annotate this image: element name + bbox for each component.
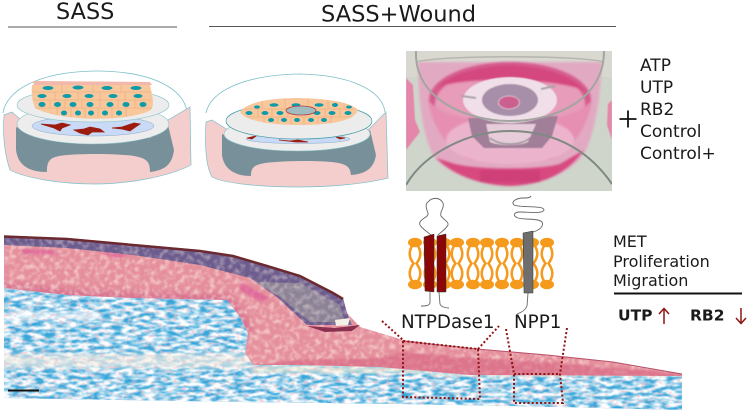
dotted zoom box: NTPDase1 region bbox=[382, 321, 499, 399]
dark line on thin epidermis bbox=[403, 341, 682, 374]
treatment list: ATP bbox=[640, 56, 671, 76]
epidermal cells bbox=[240, 98, 358, 125]
UTP up result: UTP bbox=[618, 306, 653, 324]
outcomes list: Migration bbox=[613, 271, 688, 290]
scab bbox=[307, 325, 360, 332]
upper white disc bbox=[17, 88, 169, 122]
membrane with lipid bilayer bbox=[408, 238, 554, 289]
divider under outcomes bbox=[614, 292, 742, 294]
glass rims bbox=[416, 57, 604, 62]
treatment list: RB2 bbox=[640, 100, 674, 120]
treatment list: Control bbox=[640, 122, 701, 142]
epidermis bbox=[4, 245, 682, 376]
upper white disc bbox=[226, 103, 372, 139]
diagram: wounded SASS culture insert bbox=[206, 74, 388, 187]
grey gel bbox=[222, 130, 376, 176]
outcomes list bbox=[613, 232, 710, 290]
wound bbox=[286, 106, 316, 115]
outcomes list: Proliferation bbox=[613, 252, 710, 271]
epidermal cells bbox=[32, 85, 153, 119]
neighbouring wells bbox=[406, 78, 420, 150]
dish body bbox=[418, 62, 602, 185]
dark keratin line bbox=[4, 236, 343, 299]
lower white disc bbox=[17, 104, 169, 144]
RB2 down result: RB2 bbox=[690, 306, 725, 324]
stratum corneum bbox=[33, 81, 152, 86]
RB2 down result bbox=[690, 306, 746, 324]
photo: culture well with pink medium bbox=[406, 51, 612, 191]
scale bar bbox=[8, 390, 39, 392]
treatment list: UTP bbox=[640, 78, 673, 98]
central insert bbox=[462, 77, 558, 148]
label: NPP1: NPP1 bbox=[514, 312, 561, 333]
dome of insert bbox=[3, 71, 190, 116]
histology section bbox=[0, 230, 690, 415]
treatment list bbox=[640, 56, 716, 164]
medium seen through dish bbox=[428, 62, 592, 186]
plus sign bbox=[620, 110, 636, 128]
dermis bbox=[0, 285, 690, 415]
dermal blue layer bbox=[246, 134, 350, 144]
protein: NTPDase1 bbox=[420, 198, 449, 308]
lower white disc bbox=[224, 117, 370, 151]
dermal blue layer with fibroblasts bbox=[32, 116, 154, 136]
treatment list: Control+ bbox=[640, 144, 716, 164]
heading: SASS+Wound: SASS+Wound bbox=[321, 2, 476, 28]
dotted zoom box: NPP1 region bbox=[506, 328, 567, 403]
grey gel bbox=[16, 125, 174, 172]
diagram: SASS culture insert bbox=[3, 71, 191, 184]
pink medium base bbox=[4, 107, 191, 184]
pink medium base bbox=[206, 112, 388, 187]
label: NTPDase1: NTPDase1 bbox=[401, 312, 495, 333]
dome of insert bbox=[206, 74, 385, 113]
UTP up result bbox=[618, 306, 669, 324]
outcomes list: MET bbox=[613, 232, 647, 251]
stratum corneum purple band bbox=[4, 238, 352, 325]
protein: NPP1 bbox=[513, 196, 544, 314]
